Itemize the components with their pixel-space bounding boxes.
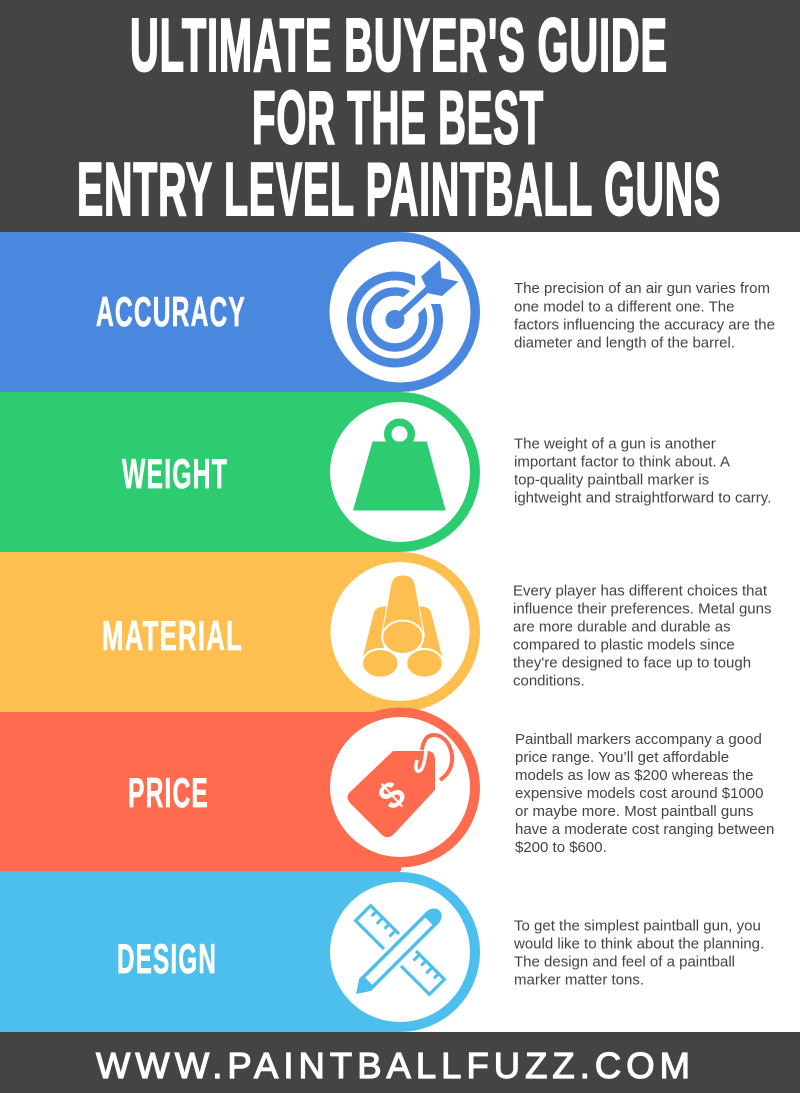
panel: accuracy [0, 232, 775, 392]
text: accuracy description: The precision of an air gun varies from [514, 280, 770, 297]
dollar sign: $ [370, 773, 414, 818]
text: material description: are more durable and durable as [513, 618, 731, 636]
text: price description: or maybe more. Most paintball guns [515, 803, 753, 820]
panel: design [0, 871, 764, 1032]
title [77, 3, 721, 231]
panel: material [0, 552, 771, 712]
icon: stacked pipes [361, 575, 444, 679]
text: price description: $200 to $600. [515, 839, 607, 856]
text: accuracy description: factors influencing the accuracy are the [514, 316, 775, 333]
footer banner [0, 1032, 800, 1093]
text: weight description: important factor to think about. A [514, 454, 730, 470]
panel: weight [0, 392, 771, 552]
text: weight description: The weight of a gun is another [514, 436, 716, 452]
icon: price tag [348, 735, 452, 837]
heading: accuracy: ACCURACY [96, 288, 246, 335]
text: price description: have a moderate cost ranging between [515, 821, 774, 838]
text: weight description: ightweight and straightforward to carry. [514, 490, 771, 506]
icon: target with arrow [352, 260, 458, 363]
heading: material: MATERIAL [102, 612, 243, 659]
text: design description: The design and feel of a paintball [514, 954, 735, 970]
icon: ruler and pencil [348, 902, 448, 1002]
text: material description: influence their preferences. Metal guns [513, 600, 771, 618]
panel: price [0, 708, 774, 871]
text: design description: To get the simplest paintball gun, you [514, 918, 761, 934]
text: design description: marker matter tons. [514, 972, 644, 988]
text: material description: conditions. [513, 672, 585, 690]
heading: price: PRICE [128, 769, 209, 816]
text: price description: price range. You’ll get affordable [515, 749, 729, 766]
heading: weight: WEIGHT [122, 450, 228, 497]
text: price description: Paintball markers accompany a good [515, 731, 762, 748]
heading: design: DESIGN [117, 935, 217, 982]
text: material description: they're designed to face up to tough [513, 654, 751, 672]
text: accuracy description: diameter and length of the barrel. [514, 334, 735, 351]
text: accuracy description: one model to a different one. The [514, 298, 734, 315]
icon: weight [353, 422, 446, 510]
text: design description: would like to think about the planning. [513, 936, 764, 952]
text: price description: models as low as $200 whereas the [515, 767, 753, 784]
website url: WWW.PAINTBALLFUZZ.COM [96, 1045, 695, 1086]
header banner [0, 0, 800, 232]
text: material description: compared to plastic models since [513, 636, 735, 654]
text: weight description: top-quality paintball marker is [514, 472, 709, 488]
text: price description: expensive models cost around $1000 [515, 785, 764, 802]
text: material description: Every player has different choices that [513, 582, 768, 600]
